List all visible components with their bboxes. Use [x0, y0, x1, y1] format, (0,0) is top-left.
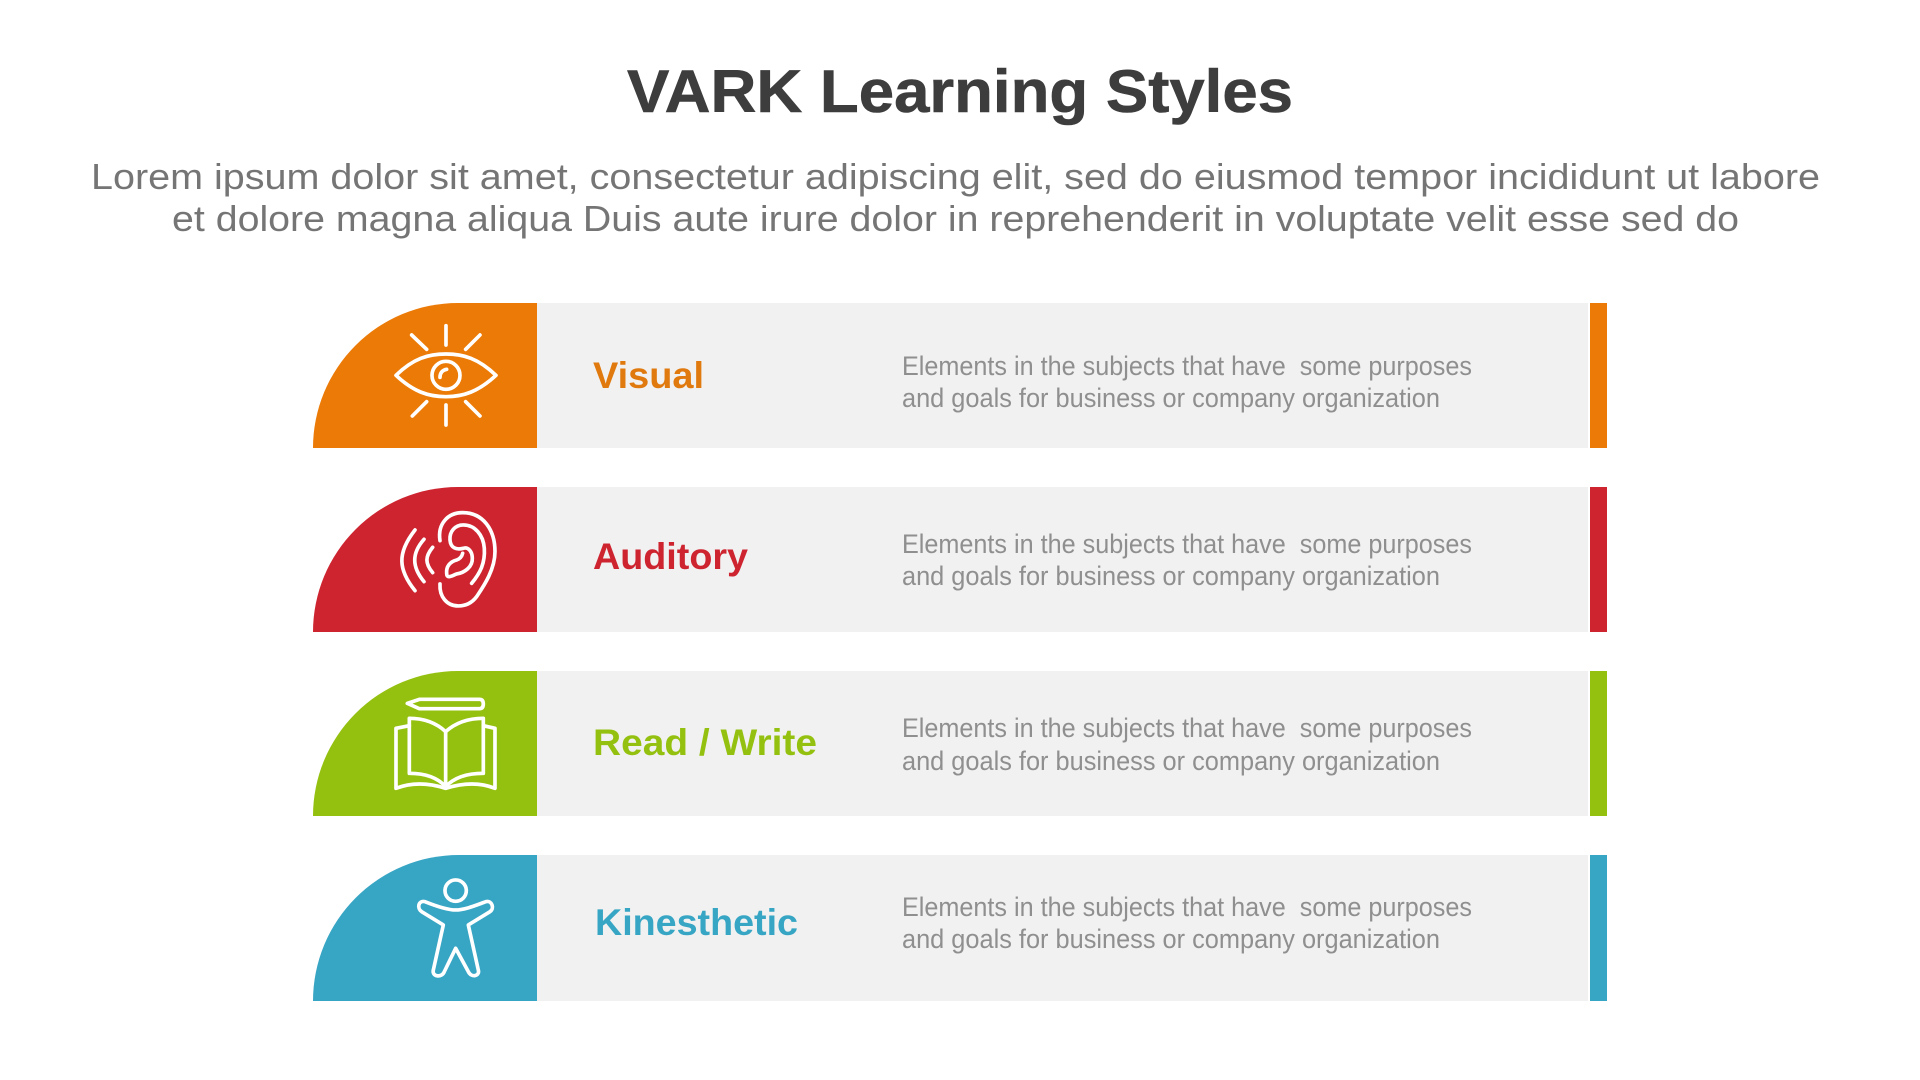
icon: eye: [396, 326, 496, 425]
row background: kinesthetic: [537, 855, 1588, 1001]
description: auditory: [902, 529, 1472, 591]
description: kinesthetic: and goals for business or company organization: [902, 924, 1440, 954]
panel: read / write: [313, 671, 1607, 816]
quarter-round tab: kinesthetic: [313, 855, 537, 1001]
subtitle text block: Lorem ipsum dolor sit amet, consectetur adipiscing elit, sed do eiusmod tempor incididunt ut labore: [91, 156, 1820, 197]
heading: kinesthetic: Kinesthetic: [595, 902, 798, 943]
heading: visual: Visual: [593, 355, 704, 396]
description: auditory: and goals for business or company organization: [902, 561, 1440, 591]
description: visual: Elements in the subjects that have some purposes: [902, 351, 1472, 381]
accent bar: read / write: [1590, 671, 1607, 816]
description: kinesthetic: Elements in the subjects that have some purposes: [902, 892, 1472, 922]
row background: auditory: [537, 487, 1588, 632]
subtitle text block: [91, 156, 1820, 239]
description: read / write: and goals for business or company organization: [902, 746, 1440, 776]
panel: auditory: [313, 487, 1607, 632]
icon: book and pencil: [396, 699, 495, 788]
description: visual: and goals for business or company organization: [902, 383, 1440, 413]
description: read / write: [902, 713, 1472, 776]
description: auditory: Elements in the subjects that have some purposes: [902, 529, 1472, 559]
quarter-round tab: read / write: [313, 671, 537, 816]
panel: visual: [313, 303, 1607, 448]
row background: read / write: [537, 671, 1588, 816]
subtitle text block: et dolore magna aliqua Duis aute irure dolor in reprehenderit in voluptate velit esse sed do: [172, 198, 1739, 239]
heading: auditory: Auditory: [593, 536, 748, 577]
description: visual: [902, 351, 1472, 413]
accent bar: auditory: [1590, 487, 1607, 632]
quarter-round tab: auditory: [313, 487, 537, 632]
accent bar: kinesthetic: [1590, 855, 1607, 1001]
title: VARK Learning Styles: [627, 58, 1293, 125]
quarter-round tab: visual: [313, 303, 537, 448]
icon: person: [419, 880, 492, 976]
description: kinesthetic: [902, 892, 1472, 954]
panel: kinesthetic: [313, 855, 1607, 1001]
accent bar: visual: [1590, 303, 1607, 448]
icon: ear: [402, 513, 495, 606]
row background: visual: [537, 303, 1588, 448]
description: read / write: Elements in the subjects that have some purposes: [902, 713, 1472, 743]
heading: read / write: Read / Write: [593, 722, 817, 763]
